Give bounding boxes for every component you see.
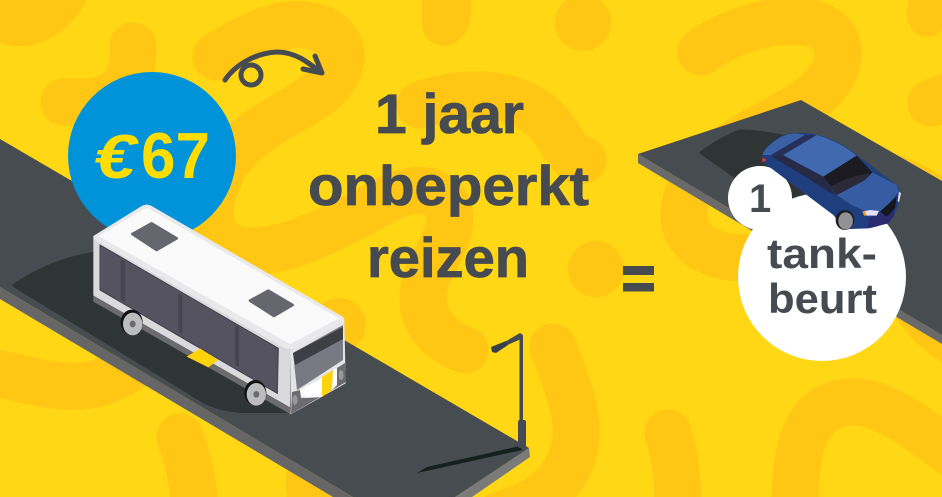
price circle	[68, 72, 236, 240]
headline: reizen	[367, 226, 529, 289]
headline: 1 jaar	[375, 82, 524, 145]
headline: onbeperkt	[308, 154, 589, 217]
lamp post	[417, 333, 526, 473]
bus	[93, 205, 346, 414]
bus windscreen	[293, 325, 343, 390]
fill-up circle with text	[728, 166, 906, 361]
price circle: 67	[141, 119, 210, 192]
headline	[308, 82, 589, 289]
bus front bumper	[291, 363, 346, 414]
fill-up circle with text: beurt	[768, 275, 877, 322]
fill-up circle with text: tank-	[767, 230, 877, 277]
curved arrow	[225, 52, 322, 85]
fill-up circle with text: 1	[749, 177, 771, 221]
road under the bus	[0, 139, 530, 497]
bus body sides and roof	[93, 205, 346, 414]
car	[762, 133, 901, 230]
road under the car	[638, 100, 942, 344]
equals sign	[623, 266, 654, 292]
price circle: €	[94, 123, 139, 192]
